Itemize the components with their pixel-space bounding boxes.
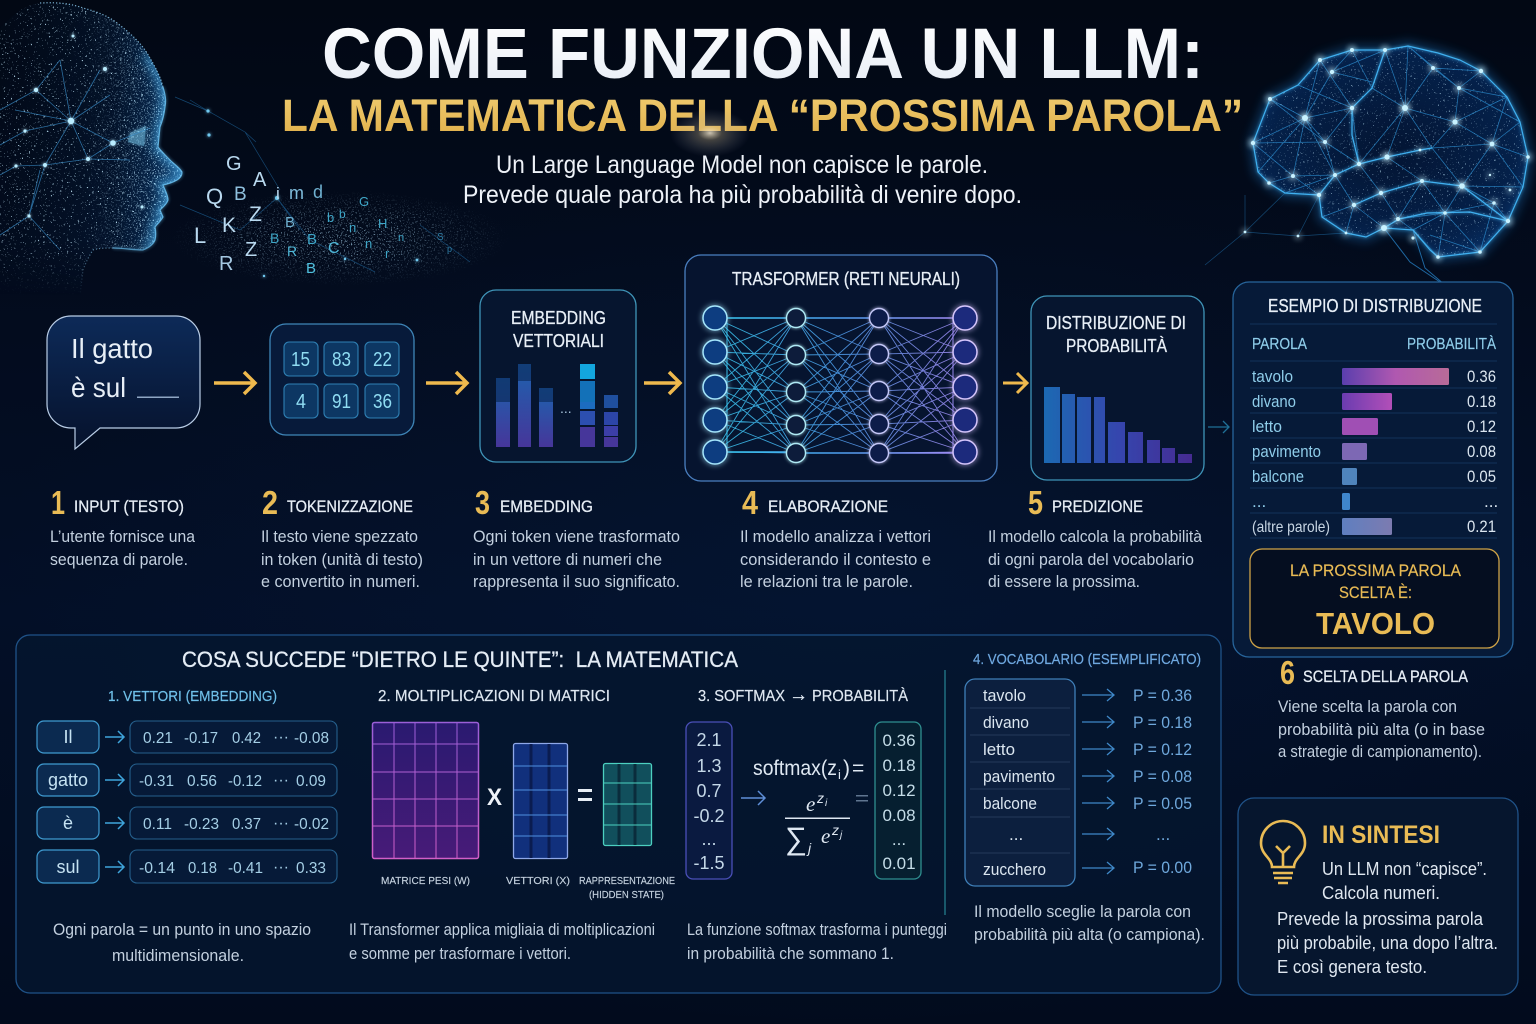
panel heading: COSA SUCCEDE “DIETRO LE QUINTE”: LA MATEMATICA [182, 647, 738, 672]
section: vocabulary: 4. VOCABOLARIO (ESEMPLIFICATO) [973, 652, 1201, 668]
illustration: particle letters: i [276, 184, 280, 203]
step 3: in un vettore di numeri che [473, 550, 662, 569]
section: softmax: 3. SOFTMAX → PROBABILITÀ [698, 684, 909, 706]
step 3: rappresenta il suo significato. [473, 572, 680, 591]
section: matrix multiplication: X [487, 784, 502, 811]
illustration: particle letters: Z [245, 239, 257, 261]
step 4: considerando il contesto e [740, 550, 931, 569]
step 4 [740, 484, 931, 591]
probability table rows: balcone [1252, 467, 1304, 486]
section: softmax [686, 684, 947, 963]
section: softmax: 1.3 [696, 756, 722, 776]
panel: vector embeddings: VETTORIALI [513, 331, 604, 351]
step 3: Ogni token viene trasformato [473, 527, 680, 546]
section: vectors: -0.14 [139, 860, 175, 877]
section: softmax: 0.18 [882, 756, 916, 775]
probability table rows: 0.05 [1467, 467, 1496, 486]
softmax formula: z [831, 822, 839, 838]
step 5: di ogni parola del vocabolario [988, 550, 1194, 569]
step 5: 5 [1028, 484, 1043, 521]
illustration: particle letters: d [313, 182, 323, 202]
illustration: particle letters: n [398, 232, 404, 244]
step 2: TOKENIZZAZIONE [287, 497, 413, 516]
illustration: particle letters: R [287, 243, 297, 259]
section: vectors: 0.33 [296, 860, 326, 877]
illustration: particle letters: B [307, 231, 317, 248]
probability table rows: 0.36 [1467, 367, 1496, 386]
section: matrix multiplication: (HIDDEN STATE) [589, 889, 664, 901]
speech bubble: input: è sul [71, 372, 126, 403]
panel: distribution example: ESEMPIO DI DISTRIBUZIONE [1268, 296, 1482, 316]
section: vocabulary: divano [983, 713, 1029, 732]
arrow: transformer to distribution [1003, 373, 1027, 393]
illustration: particle letters: L [194, 223, 206, 248]
probability table rows: 0.12 [1467, 417, 1496, 436]
section: softmax: 0.08 [882, 806, 916, 825]
step 3 [473, 484, 680, 591]
section: matrix multiplication: MATRICE PESI (W) [381, 875, 470, 887]
arrow: distribution to example [1208, 421, 1229, 433]
softmax formula: ) [843, 757, 850, 780]
softmax formula: softmax(z [753, 757, 837, 780]
section: matrix multiplication [349, 688, 675, 963]
panel: distribution example [1233, 282, 1513, 657]
panel: token grid: 91 [332, 391, 351, 413]
softmax formula: = [852, 757, 864, 780]
section: softmax: 0.7 [696, 781, 722, 801]
probability table rows: ... [1252, 492, 1266, 511]
softmax formula: e [821, 824, 830, 848]
probability table rows: 0.18 [1467, 392, 1496, 411]
step 6: 6 [1280, 654, 1295, 691]
panel: token grid: 15 [291, 349, 310, 371]
panel: probability distribution: PROBABILITÀ [1066, 336, 1167, 356]
section: vectors: ··· [273, 859, 289, 876]
probability table rows: (altre parole) [1252, 519, 1330, 536]
arrow: input to tokens [214, 372, 255, 394]
illustration: particle letters: n [365, 236, 372, 251]
illustration: particle letters: B [306, 260, 316, 277]
section: softmax: ... [701, 829, 717, 849]
panel: distribution example: PROBABILITÀ [1407, 334, 1496, 353]
section: vectors: 1. VETTORI (EMBEDDING) [108, 688, 277, 705]
panel: behind the scenes math [16, 635, 1221, 993]
illustration: digital head [0, 0, 190, 295]
section: softmax: 2.1 [696, 730, 722, 750]
section: vocabulary: P = 0.08 [1133, 767, 1192, 786]
softmax formula [753, 757, 868, 856]
subtitle: LA MATEMATICA DELLA “PROSSIMA PAROLA” [282, 90, 1243, 141]
section: vectors: -0.02 [294, 816, 329, 833]
step 2: in token (unità di testo) [261, 550, 423, 569]
intro text: Un Large Language Model non capisce le parole. [496, 151, 988, 179]
section: vectors: 0.11 [143, 816, 172, 833]
section: vocabulary: P = 0.00 [1133, 858, 1192, 877]
panel: transformer neural network: TRASFORMER (RETI NEURALI) [732, 269, 960, 289]
illustration: particle letters: B [270, 230, 279, 246]
step 2 [261, 484, 423, 591]
section: vectors: -0.08 [294, 730, 329, 747]
step 5: PREDIZIONE [1052, 497, 1143, 516]
callout: chosen word [1250, 549, 1499, 648]
panel: token grid [270, 324, 414, 435]
section: vocabulary: tavolo [983, 686, 1026, 705]
probability table rows: pavimento [1252, 442, 1321, 461]
illustration: particle letters: B [234, 184, 247, 205]
step 3: 3 [475, 484, 490, 521]
illustration: particle letters: H [378, 216, 387, 231]
title: COME FUNZIONA UN LLM: [322, 15, 1204, 94]
section: vectors: ··· [273, 772, 289, 789]
intro text [463, 151, 1022, 209]
section: vectors: 0.56 [187, 773, 217, 790]
probability table rows: 0.08 [1467, 442, 1496, 461]
step 1: 1 [51, 484, 65, 521]
illustration: particle letters: r [385, 246, 390, 261]
section: vectors: ··· [273, 815, 289, 832]
illustration: particle letters: B [285, 214, 295, 231]
section: vectors: -0.31 [139, 773, 174, 790]
section: vocabulary: zucchero [983, 860, 1046, 879]
section: softmax: 0.01 [882, 854, 916, 873]
section: vectors [37, 688, 337, 965]
step 5 [988, 484, 1202, 591]
section: vectors: ··· [273, 729, 289, 746]
panel: vector embeddings [480, 290, 636, 462]
panel: vector embeddings: ... [560, 400, 572, 416]
icon: light bulb [1261, 821, 1305, 883]
section: vectors: 0.18 [188, 860, 217, 877]
callout: chosen word: SCELTA È: [1339, 583, 1412, 602]
illustration: particle letters: n [349, 220, 356, 235]
section: softmax: -0.2 [693, 806, 725, 826]
panel: token grid: 4 [296, 391, 306, 413]
step 5: di essere la prossima. [988, 572, 1140, 591]
step 1: INPUT (TESTO) [74, 497, 184, 516]
illustration: particle letters: C [328, 240, 340, 257]
softmax formula: z [816, 790, 824, 806]
panel: distribution example: PAROLA [1252, 336, 1307, 353]
section: vectors: gatto [48, 770, 88, 790]
softmax formula: j [806, 840, 812, 856]
panel: token grid: 22 [373, 349, 392, 371]
section: vocabulary: P = 0.12 [1133, 740, 1192, 759]
section: vocabulary: P = 0.05 [1133, 794, 1192, 813]
softmax formula: j [838, 830, 843, 841]
step 4: le relazioni tra le parole. [740, 572, 913, 591]
section: vocabulary [965, 652, 1205, 944]
section: softmax: 0.12 [882, 781, 916, 800]
softmax formula: i [838, 767, 841, 782]
illustration: particle letters: S [437, 232, 444, 243]
step 2: e convertito in numeri. [261, 572, 420, 591]
step 3: EMBEDDING [500, 497, 593, 516]
speech bubble: input [47, 316, 200, 449]
step 2: 2 [262, 484, 278, 521]
illustration: neural brain [1205, 44, 1532, 285]
illustration: particle letters: A [253, 169, 267, 191]
illustration: particle letters: b [339, 207, 346, 221]
step 1: sequenza di parole. [50, 550, 188, 569]
step 4: ELABORAZIONE [768, 497, 888, 516]
section: vocabulary: letto [983, 740, 1015, 759]
panel: transformer neural network [685, 255, 997, 481]
step 6: SCELTA DELLA PAROLA [1303, 667, 1469, 686]
section: softmax: -1.5 [693, 853, 725, 873]
section: vectors: 0.09 [296, 773, 326, 790]
section: vectors: -0.17 [184, 730, 218, 747]
probability table rows: ... [1484, 492, 1498, 511]
section: vectors: Ogni parola = un punto in uno spazio [53, 920, 311, 939]
section: vectors: 0.42 [232, 730, 261, 747]
section: vectors: Il [64, 727, 72, 747]
softmax formula: ∑ [785, 821, 807, 856]
intro text: Prevede quale parola ha più probabilità di venire dopo. [463, 181, 1022, 209]
illustration: particle letters: b [327, 210, 334, 225]
callout: chosen word: TAVOLO [1316, 606, 1435, 641]
section: vocabulary: pavimento [983, 767, 1055, 786]
section: matrix multiplication: RAPPRESENTAZIONE [579, 875, 675, 887]
section: vocabulary: balcone [983, 794, 1037, 813]
section: softmax: 0.36 [882, 731, 916, 750]
illustration: particle letters: R [219, 253, 233, 275]
panel: token grid: 83 [332, 349, 351, 371]
probability table rows [1252, 367, 1498, 536]
panel: summary: Calcola numeri. [1322, 883, 1440, 903]
step 1 [50, 484, 195, 569]
section: vocabulary: ... [1156, 825, 1170, 844]
illustration: particle letters: G [226, 153, 242, 175]
panel: summary: più probabile, una dopo l’altra. [1277, 933, 1498, 953]
section: softmax: ... [892, 830, 906, 849]
step 6 [1278, 654, 1485, 761]
panel: summary: E così genera testo. [1277, 957, 1427, 977]
section: vectors: è [63, 813, 73, 833]
panel: probability distribution [1031, 296, 1204, 480]
section: vectors: 0.37 [232, 816, 261, 833]
step 1: L’utente fornisce una [50, 527, 195, 546]
step 5: Il modello calcola la probabilità [988, 527, 1202, 546]
arrow: tokens to embedding [426, 372, 467, 394]
section: vocabulary: probabilità più alta (o campiona). [974, 925, 1205, 944]
illustration: particle letters: Q [206, 184, 223, 209]
panel: token grid: 36 [373, 391, 392, 413]
speech bubble: input: Il gatto [71, 333, 153, 364]
section: vectors: multidimensionale. [112, 946, 244, 965]
step 6: probabilità più alta (o in base [1278, 720, 1485, 739]
illustration: particle letters: K [222, 214, 236, 237]
section: matrix multiplication: VETTORI (X) [506, 875, 570, 887]
probability table rows: letto [1252, 417, 1282, 436]
illustration: particle letters: p [447, 244, 452, 254]
section: softmax: in probabilità che sommano 1. [687, 944, 894, 963]
section: matrix multiplication: 2. MOLTIPLICAZIONI DI MATRICI [378, 688, 610, 705]
softmax formula: i [825, 798, 828, 809]
section: vectors: sul [56, 857, 80, 877]
step 6: Viene scelta la parola con [1278, 697, 1457, 716]
section: vocabulary: Il modello sceglie la parola con [974, 902, 1191, 921]
illustration: particle letters: m [289, 183, 304, 203]
section: matrix multiplication: Il Transformer applica migliaia di moltiplicazioni [349, 920, 655, 939]
softmax formula: e [806, 792, 815, 816]
probability table rows: tavolo [1252, 367, 1293, 386]
probability table rows: divano [1252, 392, 1296, 411]
step 2: Il testo viene spezzato [261, 527, 418, 546]
panel: summary: IN SINTESI [1322, 821, 1440, 849]
section: vectors: 0.21 [143, 730, 173, 747]
illustration: particle letters: Z [249, 203, 262, 226]
section: vocabulary: ... [1009, 825, 1023, 844]
panel: vector embeddings: EMBEDDING [511, 308, 606, 328]
step 6: a strategie di campionamento). [1278, 742, 1482, 761]
section: vocabulary: P = 0.18 [1133, 713, 1192, 732]
section: vocabulary: P = 0.36 [1133, 686, 1192, 705]
illustration: particle letters [170, 97, 510, 286]
panel: summary [1238, 798, 1518, 995]
callout: chosen word: LA PROSSIMA PAROLA [1290, 561, 1462, 580]
panel: probability distribution: DISTRIBUZIONE DI [1046, 313, 1186, 333]
step 4: Il modello analizza i vettori [740, 527, 931, 546]
section: vectors: -0.23 [184, 816, 219, 833]
panel: summary: Un LLM non “capisce”. [1322, 859, 1487, 879]
panel: summary: Prevede la prossima parola [1277, 909, 1484, 929]
arrow: embedding to transformer [644, 372, 680, 394]
section: vectors: -0.41 [228, 860, 263, 877]
step 4: 4 [742, 484, 759, 521]
probability table rows: 0.21 [1467, 517, 1496, 536]
section: matrix multiplication: e somme per trasformare i vettori. [349, 944, 571, 963]
section: vectors: -0.12 [228, 773, 262, 790]
section: softmax: La funzione softmax trasforma i punteggi [687, 920, 947, 939]
illustration: particle letters: G [359, 194, 369, 209]
